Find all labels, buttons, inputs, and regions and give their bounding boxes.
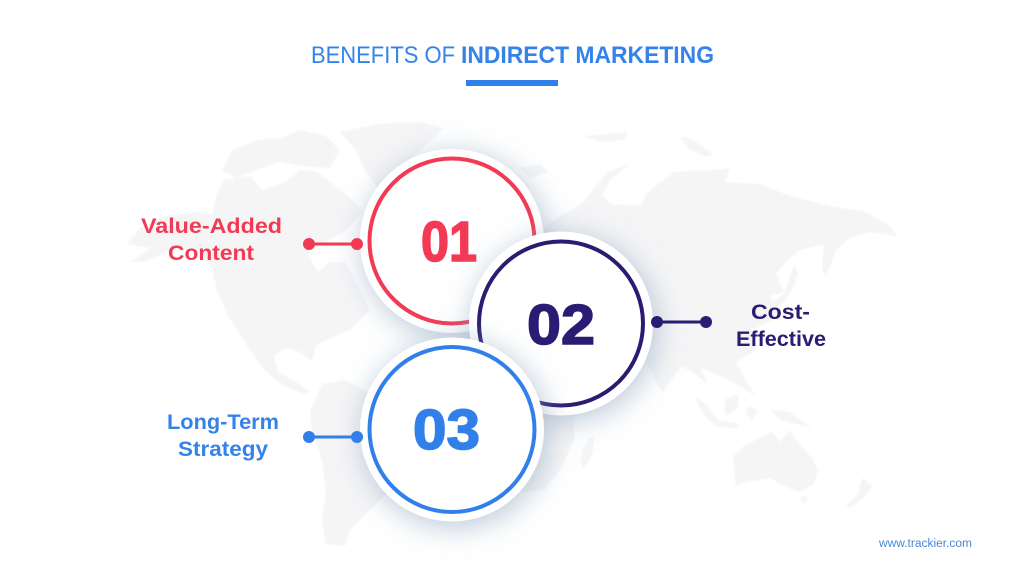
label: Long-Term Strategy: Strategy [178,438,268,461]
map: Africa [500,370,600,492]
label: Value-Added Content [141,215,282,265]
map: Australia [733,430,818,492]
label: Cost-Effective [736,301,826,351]
map: Japan [762,264,798,314]
connector 01 [303,238,363,250]
circle 01: 01 [421,210,477,274]
map: Greenland [340,122,444,192]
map: North and Central America [127,170,370,394]
map: Arctic islands [222,130,340,178]
title: INDIRECT MARKETING [461,42,714,69]
circle 02 [469,232,653,416]
circle 02: 02 [527,293,595,357]
map: South America [310,380,430,546]
map: Novaya Zemlya [680,137,714,156]
label: Long-Term Strategy [167,411,279,461]
label: Cost-Effective: Cost- [751,301,810,324]
map: Iceland [520,164,548,178]
map: Tasmania [800,497,808,503]
map: Sumatra and Java [694,396,740,428]
label: Value-Added Content: Value-Added [141,215,282,238]
map: Eurasia [530,164,897,396]
map: Madagascar [580,437,594,468]
circle 03 [360,338,544,522]
title underline [466,80,558,86]
map: Sakhalin [822,240,834,276]
circle 01 [360,149,544,333]
world map background [127,122,897,546]
map: Borneo and islands [724,394,738,416]
map: Svalbard [584,132,628,142]
title [311,42,714,69]
connector 02 [651,316,712,328]
label: Cost-Effective: Effective [736,328,826,351]
label: Long-Term Strategy: Long-Term [167,411,279,434]
title: BENEFITS OF [311,42,455,69]
map: New Zealand [846,478,872,508]
map: New Guinea [770,410,812,428]
circle 03: 03 [413,398,480,462]
website url: www.trackier.com [878,538,972,550]
label: Value-Added Content: Content [168,242,254,265]
connector 03 [303,431,363,443]
